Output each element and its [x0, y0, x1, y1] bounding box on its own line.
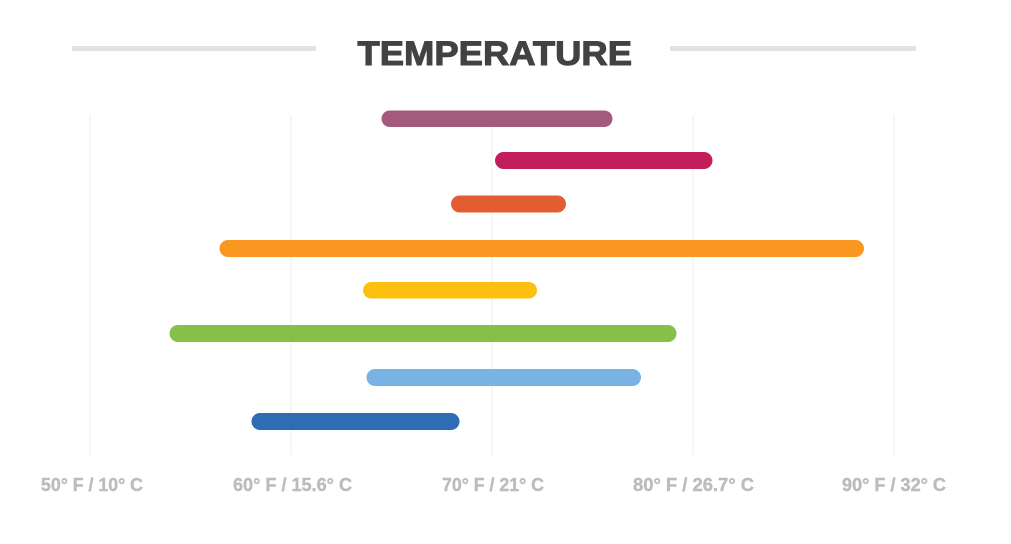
- bar: crimson: [495, 152, 712, 169]
- title rule left: [72, 46, 316, 51]
- range bars: [170, 110, 864, 430]
- label: 90 F: 90° F / 32° C: [842, 475, 946, 495]
- bar: red-orange: [451, 196, 566, 212]
- axis labels: [41, 475, 946, 495]
- label: 70 F: 70° F / 21° C: [442, 475, 544, 495]
- bar: green: [170, 325, 676, 342]
- title: TEMPERATURE: [358, 35, 632, 73]
- label: 50 F: 50° F / 10° C: [41, 475, 143, 495]
- bar: orange: [220, 240, 864, 257]
- bar: mauve: [382, 110, 612, 127]
- label: 80 F: 80° F / 26.7° C: [633, 475, 754, 495]
- title rule right: [670, 46, 916, 51]
- bar: light blue: [366, 369, 641, 386]
- label: 60 F: 60° F / 15.6° C: [233, 475, 352, 495]
- bar: blue: [252, 413, 460, 430]
- bar: yellow: [363, 282, 537, 298]
